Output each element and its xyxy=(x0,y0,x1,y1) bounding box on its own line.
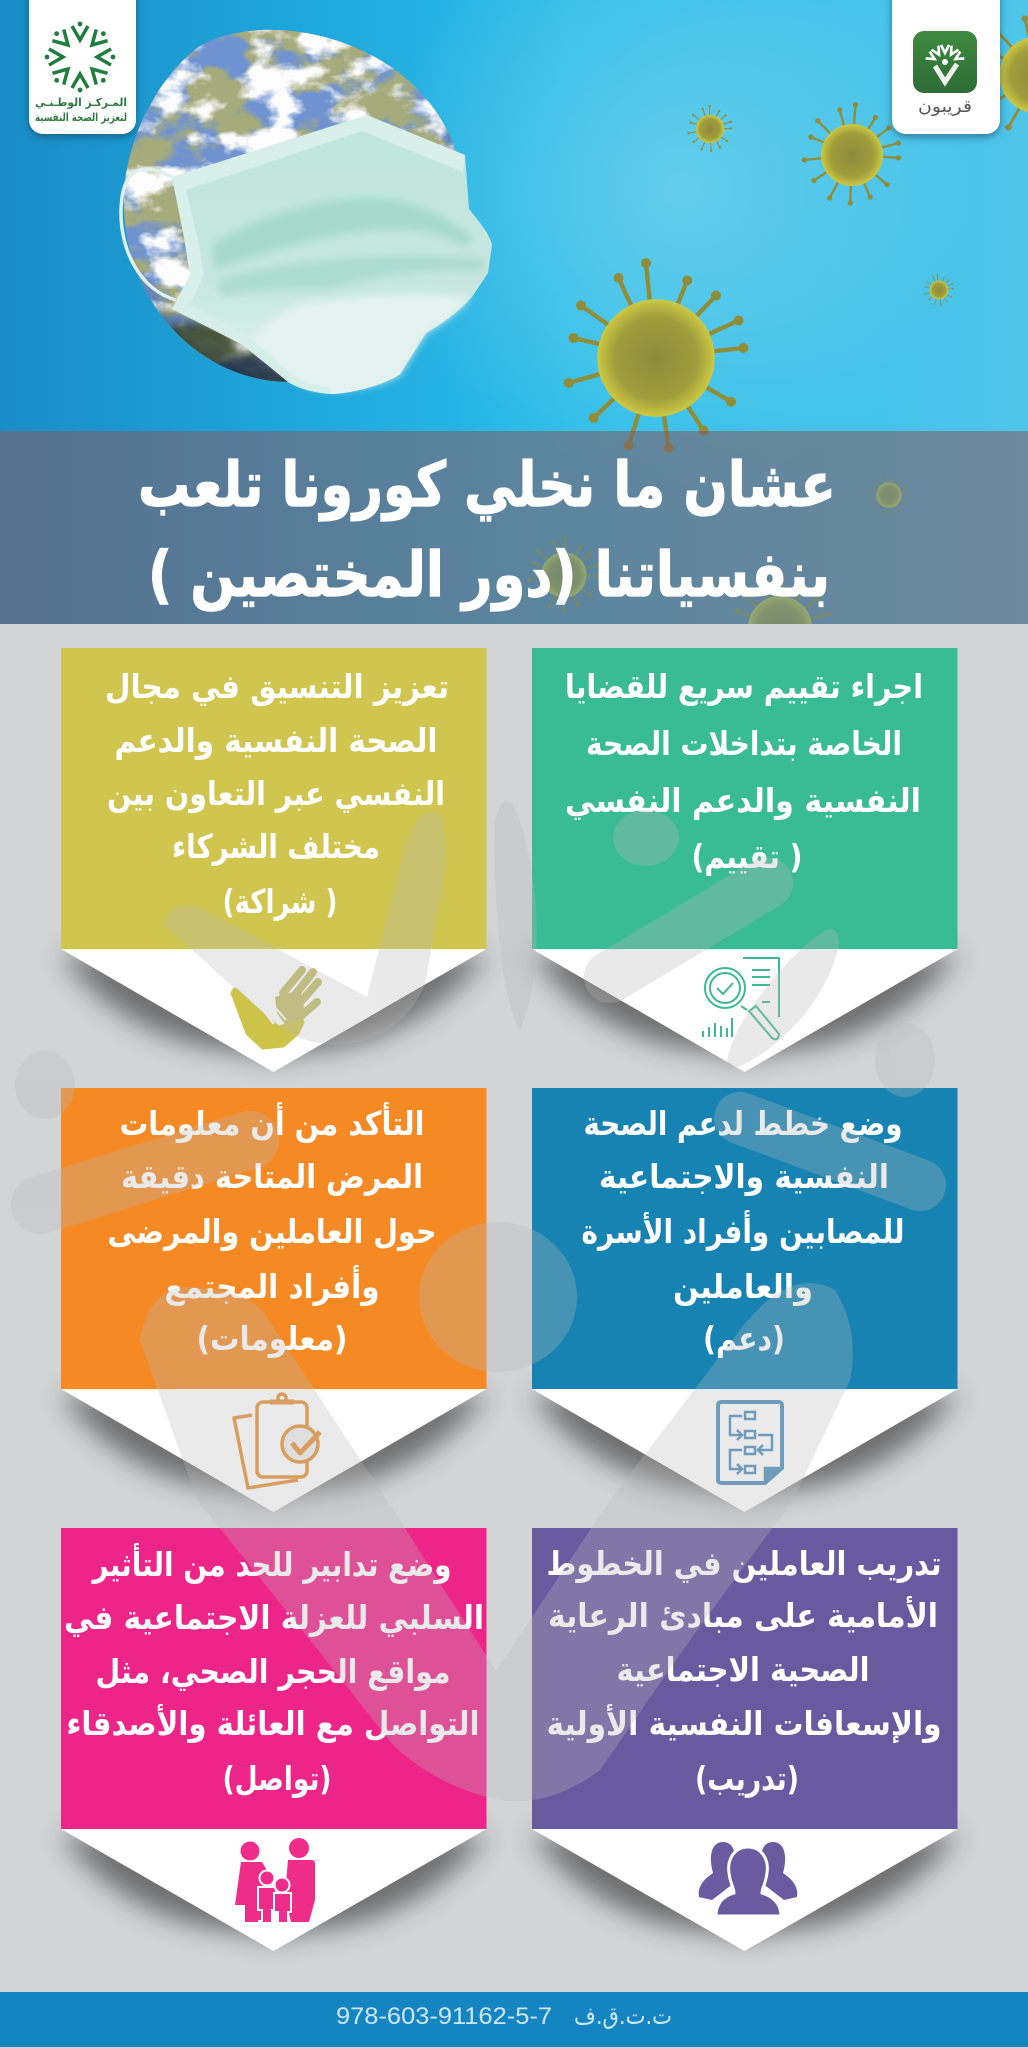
title: عشان ما نخلي كورونا تلعب xyxy=(138,448,836,521)
text: وضع تدابير للحد من التأثير xyxy=(91,1543,452,1585)
text: (تواصل) xyxy=(222,1759,332,1799)
text: والإسعافات النفسية الأولية xyxy=(546,1703,942,1744)
grey content background xyxy=(0,624,1028,1992)
ear loop xyxy=(121,169,176,300)
logo caption: المـركـز الوطـنـي xyxy=(35,96,127,109)
text xyxy=(546,1544,942,1798)
text: النفسي عبر التعاون بين xyxy=(107,774,445,814)
text: والعاملين xyxy=(673,1267,813,1307)
text xyxy=(105,667,449,922)
text: حول العاملين والمرضى xyxy=(108,1212,436,1252)
icon: flow chart document xyxy=(718,1402,782,1483)
text: السلبي للعزلة الاجتماعية في xyxy=(64,1598,484,1638)
text: وضع خطط لدعم الصحة xyxy=(584,1104,902,1144)
face mask xyxy=(172,115,492,394)
logo card: qareeboon app xyxy=(892,0,1000,134)
text: (معلومات) xyxy=(196,1319,348,1359)
watermark logo xyxy=(15,801,935,1801)
panel: communication (pink) xyxy=(60,1528,487,1951)
text: مختلف الشركاء xyxy=(172,827,380,867)
text: ( تقييم) xyxy=(692,837,802,876)
text: اجراء تقييم سريع للقضايا xyxy=(565,667,923,707)
title xyxy=(138,448,836,611)
panel: training (purple) xyxy=(531,1528,958,1951)
text: (دعم) xyxy=(703,1319,785,1358)
title band xyxy=(0,431,1028,683)
text: المرض المتاحة دقيقة xyxy=(121,1157,423,1197)
panel: assessment (green) xyxy=(531,648,958,1072)
title: بنفسياتنا (دور المختصين ) xyxy=(148,538,830,611)
icon: clipboard xyxy=(234,1394,320,1488)
text: وأفراد المجتمع xyxy=(164,1265,380,1307)
logo caption: لتعزيز الصحة النفسية xyxy=(35,111,127,124)
panel: support (blue) xyxy=(531,1088,958,1512)
text: الصحية الاجتماعية xyxy=(616,1650,870,1689)
text: للمصابين وأفراد الأسرة xyxy=(582,1210,904,1252)
logo card: national center for mental health xyxy=(29,0,136,134)
text: تعزيز التنسيق في مجال xyxy=(105,667,449,707)
isbn number: ت.ت.ق.ف xyxy=(574,2002,672,2030)
icon: hands xyxy=(233,970,318,1047)
text: تدريب العاملين في الخطوط xyxy=(546,1544,942,1584)
text: الخاصة بتداخلات الصحة xyxy=(586,724,902,763)
text: الصحة النفسية والدعم xyxy=(114,721,438,761)
app name: قريبون xyxy=(918,97,972,117)
text xyxy=(565,667,923,876)
text xyxy=(108,1102,436,1359)
text: مواقع الحجر الصحي، مثل xyxy=(96,1652,450,1692)
text: ( شراكة) xyxy=(222,882,338,922)
footer xyxy=(0,1992,1028,2047)
text: النفسية والدعم النفسي xyxy=(565,781,921,821)
text xyxy=(64,1543,484,1799)
hero background xyxy=(0,0,1028,624)
text: التأكد من أن معلومات xyxy=(120,1102,424,1144)
icon: group of people xyxy=(699,1842,797,1916)
text: الأمامية على مبادئ الرعاية xyxy=(548,1595,938,1636)
text: النفسية والاجتماعية xyxy=(599,1157,889,1197)
panel: information (orange) xyxy=(60,1088,487,1512)
icon: star logo xyxy=(45,22,115,92)
icon: family xyxy=(235,1838,315,1923)
viruses in sky xyxy=(568,2,1028,448)
text: (تدريب) xyxy=(695,1759,799,1798)
text xyxy=(582,1104,904,1358)
isbn number xyxy=(336,2002,672,2030)
globe xyxy=(124,30,456,382)
panel: partnership (yellow) xyxy=(60,648,487,1072)
text: التواصل مع العائلة والأصدقاء xyxy=(66,1703,480,1744)
icon: magnifier and report xyxy=(703,958,779,1039)
viruses inside band xyxy=(528,473,909,624)
icon: app tile xyxy=(913,31,977,93)
logo caption xyxy=(35,96,127,124)
isbn number: 978-603-91162-5-7 xyxy=(336,2003,552,2030)
